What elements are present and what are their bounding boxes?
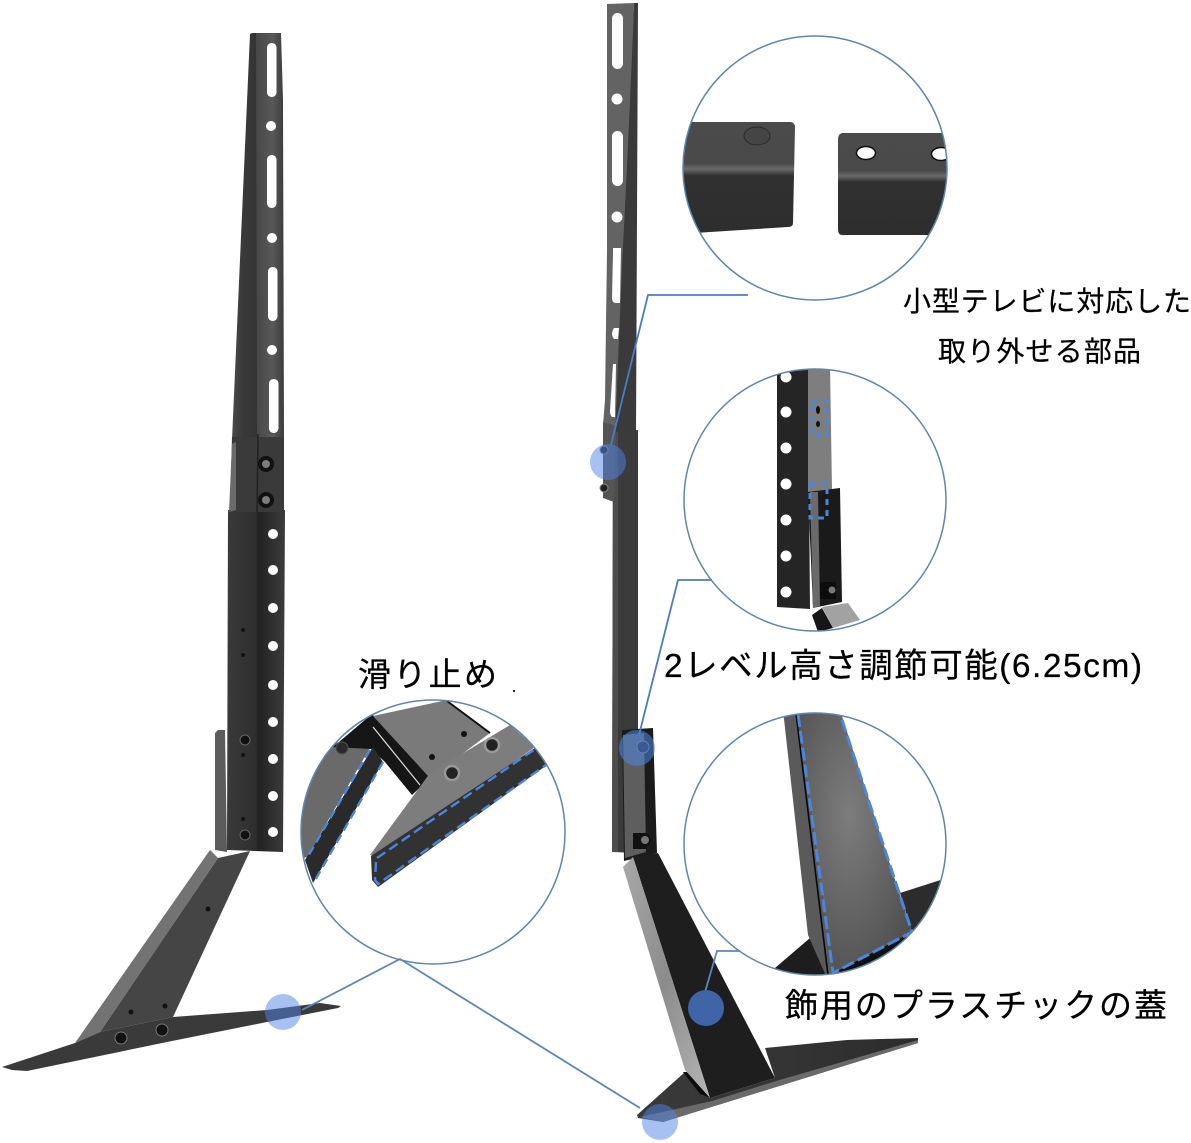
screws xyxy=(445,738,499,780)
foot screw behind xyxy=(336,742,348,754)
dashed highlights xyxy=(810,401,827,518)
label: removable parts for small TVs: 取り外せる部品 xyxy=(938,336,1141,367)
right stand: overlap plate xyxy=(600,422,616,502)
marker: height adjust screw xyxy=(619,730,655,766)
marker: removable part screw xyxy=(590,444,626,480)
black wedge xyxy=(333,714,430,795)
plate edge highlight xyxy=(373,727,420,785)
right stand: lower bracket xyxy=(612,430,638,853)
foot behind xyxy=(900,880,940,930)
leader: removable parts callout xyxy=(611,295,748,445)
label: removable parts for small TVs: 小型テレビに対応した xyxy=(903,286,1191,317)
marker: right foot tip xyxy=(642,1104,678,1140)
bracket holes xyxy=(856,146,950,160)
left stand: upper slotted bracket xyxy=(232,33,284,440)
leg top xyxy=(812,608,833,632)
leader lines xyxy=(302,295,748,1108)
left stand: lower perforated bracket xyxy=(215,510,285,852)
label: removable parts for small TVs xyxy=(903,286,1191,367)
right stand: foot xyxy=(637,1038,918,1122)
leader: plastic cover callout xyxy=(705,951,740,992)
leader: height adjustment callout xyxy=(639,580,712,735)
right stand: angled leg xyxy=(623,853,775,1098)
left grey leg xyxy=(302,742,370,858)
sleeve xyxy=(808,488,842,608)
marker: left foot tip xyxy=(265,994,301,1030)
grey strip xyxy=(808,365,832,495)
foot top surface xyxy=(370,725,535,857)
detail circle: removable parts xyxy=(680,36,950,300)
marker: plastic cover xyxy=(688,990,724,1026)
upper grey plate xyxy=(373,700,490,778)
label: decorative plastic cover: 飾用のプラスチックの蓋 xyxy=(785,987,1167,1024)
left stand: angled leg xyxy=(75,850,250,1043)
left rubber strip xyxy=(305,747,383,883)
perforated black strip xyxy=(777,365,810,609)
cover face xyxy=(798,710,912,973)
left TV stand xyxy=(2,33,341,1071)
right metal bracket piece xyxy=(838,133,950,235)
detail circle: height adjustment xyxy=(684,365,946,632)
right stand: inner sleeve with screw xyxy=(622,728,657,861)
blue marker dots xyxy=(265,444,724,1140)
foot rubber strip xyxy=(371,748,547,887)
dashed outline xyxy=(798,714,912,973)
detail circle: plastic cover xyxy=(684,710,950,976)
left metal bracket piece xyxy=(680,122,795,234)
side strip xyxy=(783,710,835,976)
left stand: foot xyxy=(2,1003,341,1071)
left stand: overlap plate with screws xyxy=(229,434,284,512)
label: anti-slip: 滑り止め xyxy=(358,656,497,693)
stray dot xyxy=(513,690,515,692)
right TV stand xyxy=(600,3,918,1122)
rubber button xyxy=(744,127,770,145)
label: two level height adjustment: 2レベル高さ調節可能(6.25cm) xyxy=(664,648,1142,685)
screw holes xyxy=(816,406,820,414)
right stand: upper slotted bracket xyxy=(603,3,638,434)
detail circle: anti-slip strips xyxy=(296,700,565,964)
leader: anti-slip callout xyxy=(302,959,640,1108)
